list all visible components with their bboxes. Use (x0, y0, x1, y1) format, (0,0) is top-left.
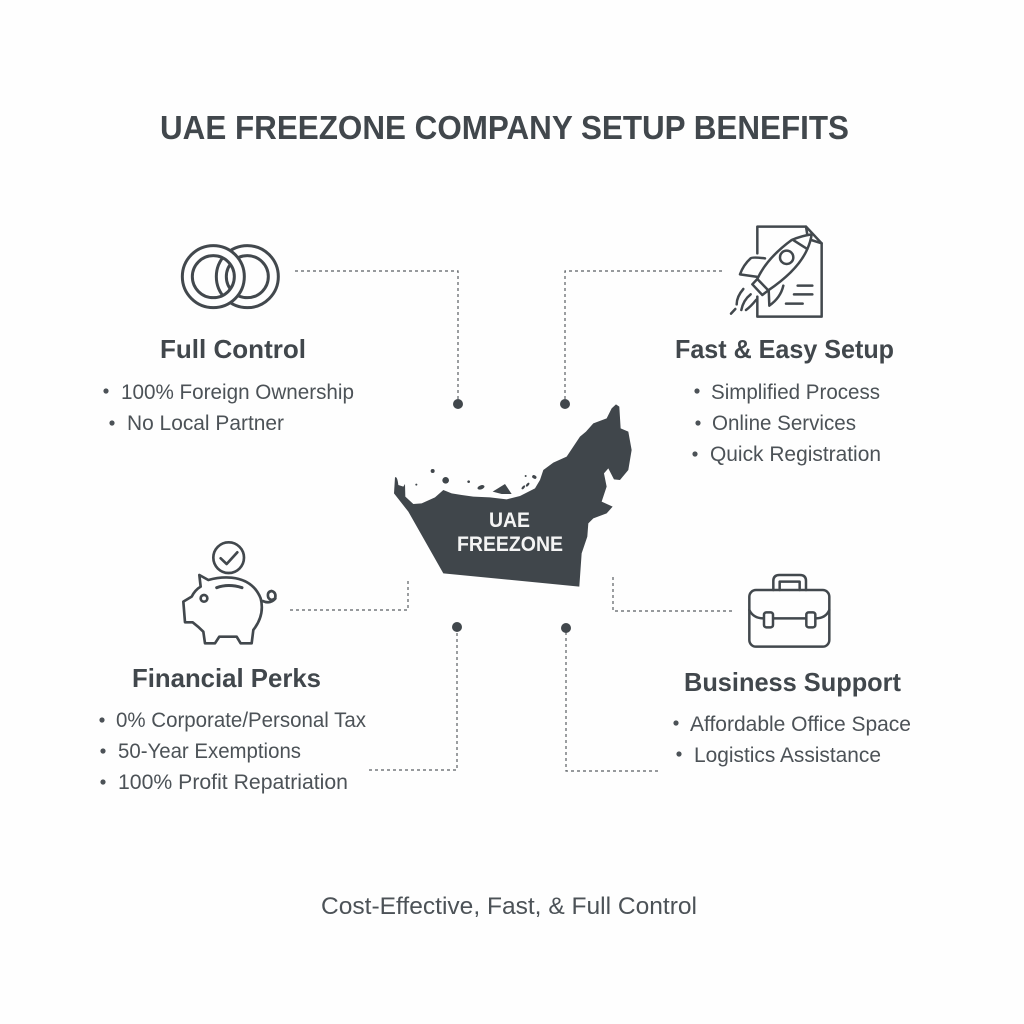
map silhouette (394, 404, 632, 587)
icon: interlocked rings (182, 246, 278, 308)
footer tagline: Cost-Effective, Fast, & Full Control (321, 893, 697, 920)
panel: business support (673, 575, 911, 767)
connector: business support icon to map (613, 577, 735, 611)
list (673, 713, 911, 767)
list: No Local Partner (127, 412, 284, 435)
list: 50-Year Exemptions (118, 740, 301, 763)
list: Quick Registration (710, 443, 881, 466)
connector: financial perks list to map (369, 622, 462, 770)
panel: financial perks (99, 542, 366, 794)
list: Online Services (712, 412, 856, 435)
heading: Business Support (684, 667, 901, 697)
icon: briefcase (749, 575, 829, 647)
icon: piggy bank with check (183, 542, 275, 643)
list: 100% Profit Repatriation (118, 771, 348, 794)
connector: financial perks icon to map (290, 578, 408, 610)
list (99, 709, 366, 794)
list (103, 381, 354, 435)
list: 100% Foreign Ownership (121, 381, 354, 404)
heading: Financial Perks (132, 663, 321, 693)
panel: full control (103, 246, 354, 435)
list: Simplified Process (711, 381, 880, 404)
icon: rocket and document (731, 227, 822, 317)
connector: business support list to map (561, 623, 658, 771)
list: Logistics Assistance (694, 744, 881, 767)
list: 0% Corporate/Personal Tax (116, 709, 366, 732)
connector: fast setup to map (560, 271, 722, 409)
panel: fast and easy setup (675, 227, 894, 466)
central UAE map: FREEZONE (457, 533, 563, 556)
connector: full control to map (295, 271, 463, 409)
central UAE map (394, 404, 632, 587)
title: UAE FREEZONE COMPANY SETUP BENEFITS (160, 109, 849, 146)
list: Affordable Office Space (690, 713, 911, 736)
list (692, 381, 881, 466)
heading: Fast & Easy Setup (675, 334, 894, 364)
heading: Full Control (160, 334, 306, 364)
map label: UAE (489, 509, 530, 532)
